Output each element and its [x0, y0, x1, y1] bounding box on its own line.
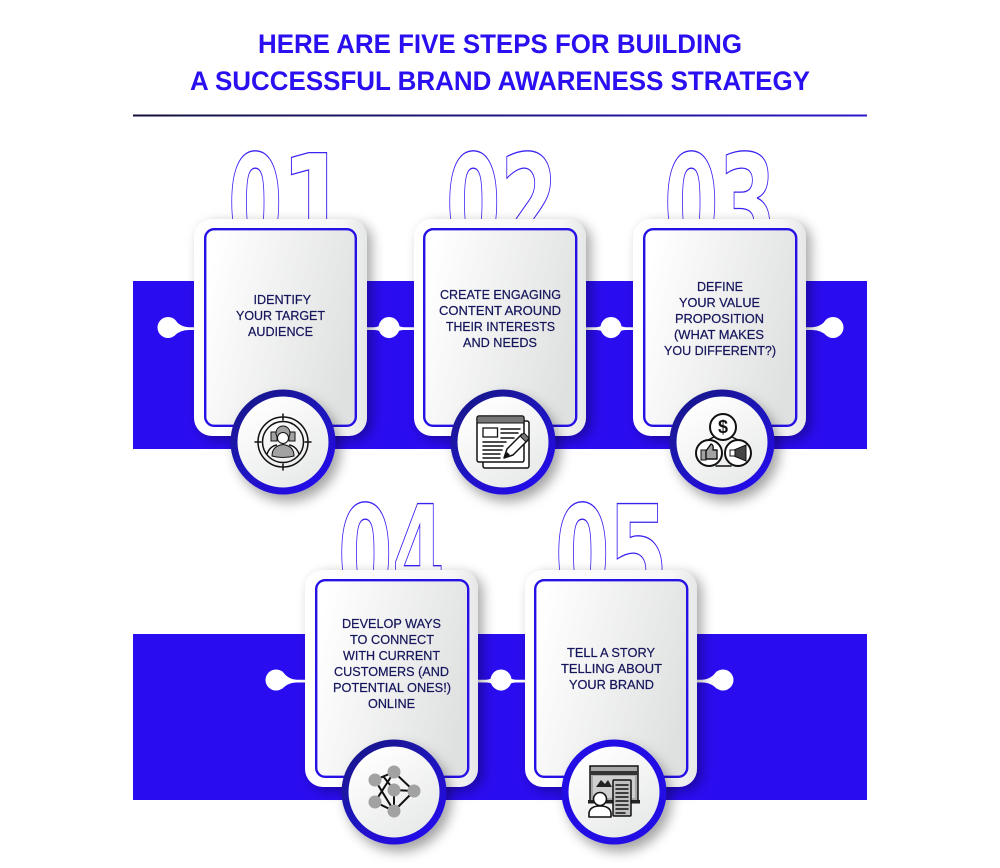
- step 2 text: THEIR INTERESTS: [446, 320, 555, 334]
- number 02: 2: [500, 127, 558, 283]
- card 3 outer: [633, 219, 806, 436]
- card 2 inner: [424, 229, 576, 426]
- panel: step 4: [305, 476, 478, 841]
- step 4 text: ONLINE: [368, 697, 415, 711]
- step 2 text: CREATE ENGAGING: [440, 288, 561, 302]
- step 5 text: YOUR BRAND: [569, 678, 654, 692]
- step 3 text: YOU DIFFERENT?): [664, 344, 776, 358]
- step 2 text: CONTENT AROUND: [439, 304, 561, 318]
- icon: network: [368, 766, 420, 818]
- number 05: [555, 477, 668, 635]
- card 5 inner: [535, 580, 687, 777]
- connectors: bottom row: [266, 670, 734, 691]
- title: A SUCCESSFUL BRAND AWARENESS STRATEGY: [190, 66, 810, 96]
- step 4 text: WITH CURRENT: [343, 649, 440, 663]
- number 03: [664, 127, 776, 284]
- card 1 outer: [194, 219, 367, 436]
- bottom blue band: [133, 634, 867, 800]
- number 02: [446, 127, 558, 284]
- step 5 text: [561, 646, 662, 692]
- step 4 text: CUSTOMERS (AND: [334, 665, 449, 679]
- number 05: 5: [608, 477, 668, 634]
- title: [190, 29, 810, 96]
- step 1 badge: [234, 393, 332, 491]
- card 1 inner: [205, 229, 356, 426]
- step 3 text: YOUR VALUE: [679, 296, 760, 310]
- number 04: 4: [392, 476, 445, 634]
- icon: content editing: [477, 416, 529, 468]
- step 4 text: POTENTIAL ONES!): [333, 681, 451, 695]
- icon: target audience: [255, 414, 311, 470]
- panel: step 1: [194, 127, 367, 491]
- number 04: [338, 476, 445, 635]
- step 2 badge: [454, 393, 552, 491]
- title: HERE ARE FIVE STEPS FOR BUILDING: [258, 29, 742, 59]
- connectors: top row: [158, 317, 844, 338]
- step 5 text: TELL A STORY: [567, 646, 656, 660]
- step 2 text: AND NEEDS: [463, 336, 537, 350]
- step 1 text: AUDIENCE: [248, 325, 313, 339]
- card 4 outer: [305, 570, 478, 787]
- step 3 badge: [673, 393, 771, 491]
- step 5 text: TELLING ABOUT: [561, 662, 662, 676]
- step 3 text: [664, 280, 776, 358]
- card 4 inner: [316, 580, 468, 777]
- step 3 text: PROPOSITION: [675, 312, 764, 326]
- panel: step 3: [633, 127, 806, 491]
- top blue band: [133, 281, 867, 449]
- step 1 text: YOUR TARGET: [236, 309, 325, 323]
- icon: value proposition: $: [718, 417, 728, 437]
- icon: brand story: [588, 766, 640, 817]
- number 03: 0: [664, 127, 718, 284]
- panel: step 5: [525, 477, 697, 841]
- panel: step 2: [414, 127, 586, 491]
- step 5 badge: [565, 743, 663, 841]
- step 1 text: [236, 293, 325, 339]
- step 4 text: TO CONNECT: [350, 633, 434, 647]
- step 2 text: [439, 288, 561, 350]
- step 4 text: DEVELOP WAYS: [342, 617, 441, 631]
- number 04: 0: [338, 478, 392, 635]
- step 4 text: [333, 617, 451, 711]
- number 02: 0: [446, 127, 500, 284]
- step 3 text: DEFINE: [697, 280, 743, 294]
- card 3 inner: [644, 229, 796, 426]
- number 03: 3: [718, 127, 776, 283]
- number 01: 0: [228, 127, 282, 284]
- number 01: 1: [280, 127, 350, 284]
- number 01: [228, 127, 350, 284]
- step 4 badge: [345, 743, 443, 841]
- card 5 outer: [525, 570, 697, 787]
- step 3 text: (WHAT MAKES: [674, 328, 764, 342]
- number 05: 0: [555, 478, 609, 635]
- step 1 text: IDENTIFY: [254, 293, 312, 307]
- card 2 outer: [414, 219, 586, 436]
